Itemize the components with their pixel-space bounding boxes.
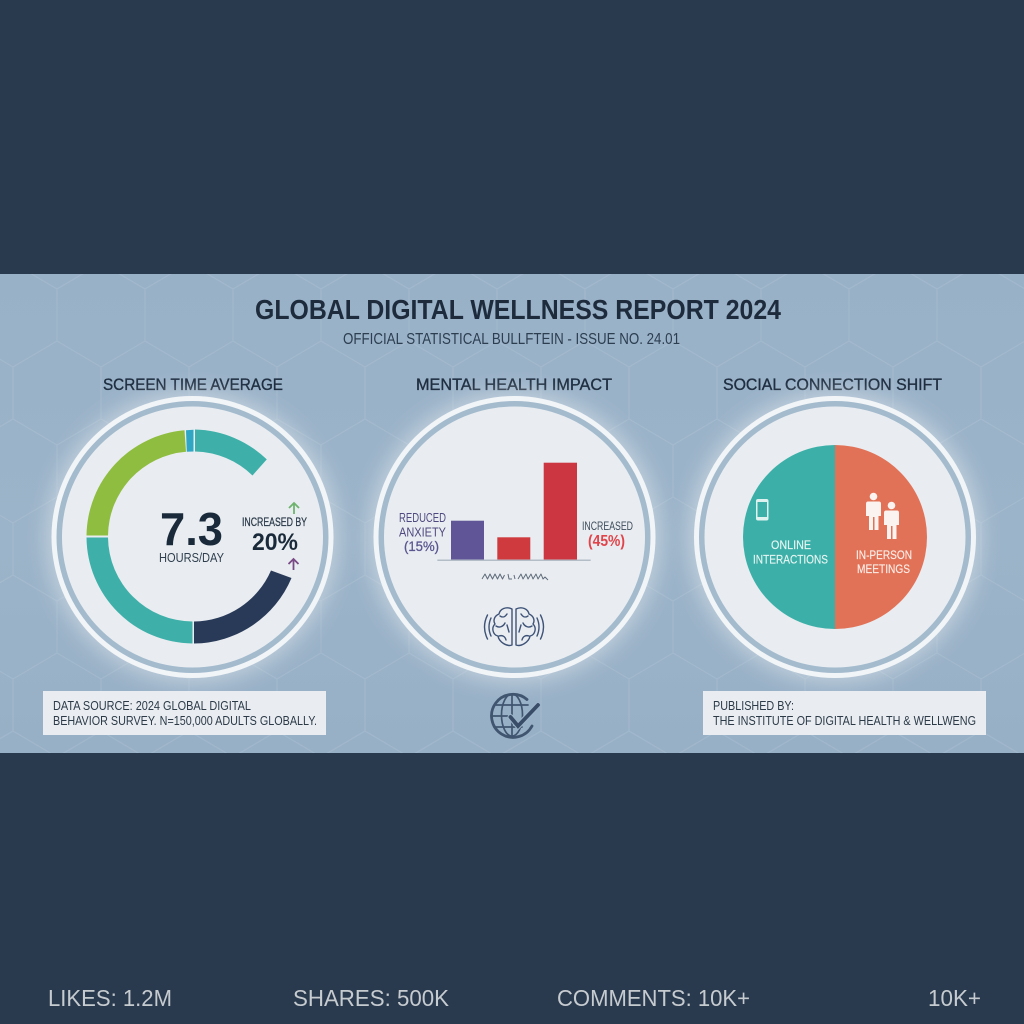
- heading: screen time average: SCREEN TIME AVERAGE: [103, 376, 283, 394]
- value: 7.3 hours/day: 7.3: [160, 503, 223, 555]
- panel: screen time average: [46, 376, 338, 683]
- heading: mental health impact: MENTAL HEALTH IMPACT: [416, 376, 612, 394]
- circle frame: [368, 391, 660, 683]
- label: increased: INCREASED: [582, 519, 633, 533]
- stat: comments: COMMENTS: 10K+: [557, 985, 750, 1011]
- heading: social connection shift: SOCIAL CONNECTION SHIFT: [723, 376, 942, 394]
- label: in-person meetings: MEETINGS: [857, 562, 910, 576]
- data source box: DATA SOURCE: 2024 GLOBAL DIGITAL: [53, 699, 251, 713]
- label: reduced anxiety: ANXIETY: [399, 526, 447, 540]
- panel: social connection shift: [689, 376, 981, 683]
- icon: purple up arrow: [288, 559, 298, 570]
- icon: globe with check mark: [491, 694, 538, 737]
- icon: two people: [866, 493, 899, 539]
- callout: increased by 20%: 20%: [252, 529, 298, 556]
- stat: likes: LIKES: 1.2M: [48, 985, 172, 1011]
- panel: mental health impact: [368, 376, 660, 683]
- circle frame: [689, 391, 981, 683]
- title: GLOBAL DIGITAL WELLNESS REPORT 2024: [255, 294, 782, 325]
- label: reduced anxiety: (15%): [404, 539, 439, 554]
- pie chart: [743, 445, 927, 629]
- label: increased: [582, 519, 633, 550]
- panel: report band: [0, 274, 1024, 753]
- label: online interactions: [753, 538, 828, 566]
- icon: green up arrow: [289, 503, 299, 514]
- label: online interactions: ONLINE: [771, 538, 811, 552]
- callout: increased by 20%: [242, 517, 307, 556]
- donut chart: [86, 430, 292, 644]
- publisher box: PUBLISHED BY:: [713, 699, 794, 713]
- value: 7.3 hours/day: HOURS/DAY: [159, 551, 225, 565]
- icon: brainwave squiggle: [482, 574, 548, 580]
- callout: increased by 20%: INCREASED BY: [242, 517, 307, 529]
- label: reduced anxiety: [399, 511, 447, 554]
- icon: phone: [756, 499, 768, 520]
- icon: brain: [484, 608, 544, 645]
- stat: extra count: 10K+: [928, 985, 981, 1011]
- label: online interactions: INTERACTIONS: [753, 552, 828, 566]
- footer stats: [48, 985, 981, 1011]
- publisher box: [703, 691, 986, 735]
- data source box: [43, 691, 326, 735]
- label: reduced anxiety: REDUCED: [399, 511, 446, 525]
- data source box: BEHAVIOR SURVEY. N=150,000 ADULTS GLOBALLY.: [53, 714, 317, 728]
- publisher box: THE INSTITUTE OF DIGITAL HEALTH & WELLWENG: [713, 714, 976, 728]
- subtitle: OFFICIAL STATISTICAL BULLFTEIN - ISSUE NO. 24.01: [343, 331, 680, 348]
- circle frame: [46, 391, 338, 683]
- bar chart: [437, 463, 591, 561]
- label: in-person meetings: IN-PERSON: [856, 548, 912, 562]
- stat: shares: SHARES: 500K: [293, 985, 450, 1011]
- label: in-person meetings: [856, 548, 912, 576]
- label: increased: (45%): [588, 533, 625, 550]
